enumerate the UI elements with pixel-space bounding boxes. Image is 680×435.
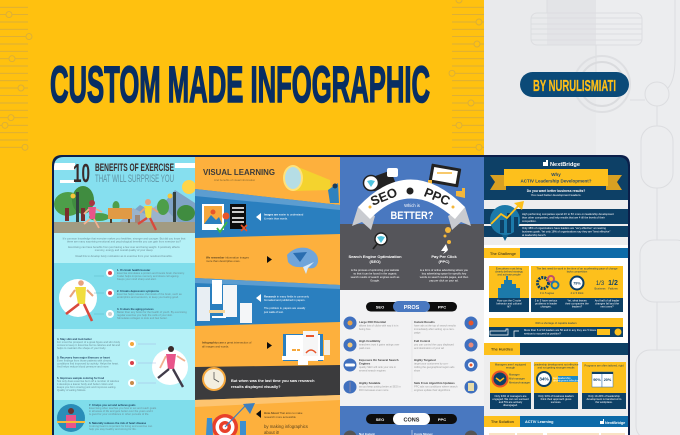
stats band [484, 200, 630, 245]
icon: magnifier and camera [364, 168, 398, 192]
pros list: Highly Targeted [414, 358, 436, 362]
seo description: search results of search engines such as [351, 275, 400, 279]
ribbon banner: ACTIV Leadership Development? [520, 178, 592, 184]
challenge box two: changes fail and the [595, 302, 620, 306]
pros list: PPC ads run conditions where search [414, 384, 458, 388]
pros list: and destination of your ad [414, 346, 444, 350]
intro text: Exercising can have benefits from just having a few over and being weight. It positively affects [68, 245, 180, 249]
ppc description: (PPC) [439, 259, 450, 264]
band: research: Research in many fields is commonly [264, 294, 310, 298]
section two: it develops a leaner body and better colors and [57, 382, 113, 386]
section two [57, 338, 188, 392]
section one: 1. It's brain health booster [117, 268, 150, 272]
challenge box two: 4 in 5 think [570, 291, 584, 295]
yellow background [0, 0, 484, 435]
hurdle box one: engaged. We can not succeed [492, 397, 529, 401]
pros header: SEO [376, 304, 384, 310]
ppc description [420, 254, 469, 282]
pros list: several search engines [359, 368, 386, 372]
section one: It also helps improve memory and slows cell ageing. [117, 274, 179, 278]
icon: monitor [282, 331, 330, 365]
seo description: so that it can be found in the organic [353, 272, 397, 276]
pros list: Engines [359, 362, 371, 366]
pros list: have ads at the top of search results [414, 324, 457, 328]
hurdle box two: Leadership development not effective [534, 362, 579, 366]
band: images: Images are easier to understand [264, 212, 304, 216]
pros list: immediately after setting up a cam- [414, 327, 455, 331]
icon: clock [202, 367, 226, 391]
pros header: PPC [438, 304, 446, 310]
section two: conditions find improved by activity. Helps the heart. [57, 362, 119, 366]
author badge [520, 72, 629, 97]
solution tab: ACTIV Learning [525, 420, 554, 424]
band: remember: We remember information images [206, 256, 249, 260]
stats band: competition. [522, 219, 537, 223]
heading number: 10 [73, 158, 90, 188]
panel: exercise benefits [54, 157, 196, 435]
logo: NextBridge [550, 162, 580, 168]
section two: comes to keep it. Exercise burns calories and fat and [57, 343, 121, 347]
band: research: The problem is, papers are usually [264, 306, 306, 310]
challenge box two: their companies the [565, 302, 589, 306]
intro text: Read this to develop lively motivation as to exercise from your newfound benefits. [76, 254, 173, 258]
stats band: at leadership bench. [522, 233, 546, 237]
challenge wide box: With a shortage of capable leaders [535, 321, 577, 325]
card frame [52, 155, 630, 435]
pros list: allows lots of clicks with say it is in [359, 324, 399, 328]
subheading: And benefits of visual information [214, 178, 256, 182]
pros list: High Credibility [359, 339, 381, 343]
which is better label: Which is [404, 203, 420, 208]
section three: A strong heart is important for living and exercise can [89, 424, 153, 428]
section one: endorphins and serotonin, to keep you feeling good. [117, 295, 179, 299]
hurdles tab: The Hurdles [491, 348, 513, 352]
ribbon arch [352, 180, 471, 230]
hurdle box two: think their approach gives [541, 397, 572, 401]
section three: is good for your confidence in other pursuits of life. [89, 412, 149, 416]
hurdle box two: Only 34% of business leaders [538, 394, 574, 398]
ppc description: Pay Per Click [431, 254, 457, 259]
icon: picture versus text [202, 204, 247, 232]
ribbon arch: PPC [422, 185, 453, 209]
stats band: Only 38% of organizations have leaders are "very effective" at meeting [522, 226, 606, 230]
stats band: business goals. Yet only 18% of organizations say they are "best effective" [522, 230, 610, 234]
hurdle box three: Programs are often tailored, rigid [584, 364, 624, 368]
section one: regular exercise you help the cells of your skin. [117, 313, 173, 317]
challenge box two: 1/2 [608, 280, 618, 287]
challenge box two: Failures [608, 286, 618, 290]
logo [543, 160, 580, 168]
pros list: paid ones [359, 346, 371, 350]
band: infographics [202, 331, 330, 365]
section two: helps to maintain the shape of your body. [57, 346, 106, 350]
icon: telescope [283, 165, 339, 203]
pros list [344, 316, 478, 394]
band: question: But when was the last time you saw research [231, 378, 315, 383]
hurdle box one [490, 362, 531, 409]
section two: 5. Recovery from major illnesses or heart [57, 356, 110, 360]
hurdle box two [534, 362, 580, 409]
intro text: memory, energy and overall quality of your sleep. [95, 248, 154, 252]
pros header: PROS [404, 305, 420, 311]
section one: Better than any botox for the health of youth. By exercising [117, 310, 187, 314]
stats band: High performing companies spend 2X to 5X more on leadership development [522, 212, 614, 216]
section two: 6. Improves sample coloring for food [57, 376, 105, 380]
hurdle box two: and not getting stronger results [537, 366, 575, 370]
hurdle box one: Mid-manager [509, 376, 525, 380]
icon: laptop and coins [425, 164, 465, 198]
ppc description: pay per click on your ad. [429, 278, 459, 282]
hero scene [54, 157, 196, 233]
panel: SEO vs PPC [340, 157, 484, 435]
band: remember [206, 248, 318, 274]
right tick decoration [449, 0, 484, 150]
section one [54, 263, 195, 329]
section three: Exercising often teaches you how to set and reach goals [89, 406, 157, 410]
hurdle box one: enough [506, 366, 515, 370]
seo description: is the process of optimizing your website [351, 268, 400, 272]
section two: Even findings from those patients with chronic [57, 358, 112, 362]
which is better label [391, 204, 433, 219]
pros list: show [414, 368, 420, 372]
section one: Exercise stimulates a protein and boosts brain chemistry. [117, 271, 185, 275]
pros list: engines update their algorithms [414, 388, 451, 392]
grey background panel [484, 0, 680, 435]
section two: And helps reduce blood pressure and more. [57, 364, 110, 368]
solution tab: The Solution [491, 420, 515, 424]
icon: seo magnifier [373, 233, 387, 249]
band: remember: more than descriptive ones. [206, 259, 241, 263]
solution boxes [489, 433, 625, 435]
challenge box two: 1/3 [596, 281, 605, 287]
challenge wide box: More than 6 of 10 leaders are 50 and in any they are 5 times as [524, 328, 600, 332]
section three: help you stay healthy and strong for life. [89, 427, 137, 431]
pros list: target your customers by con- [414, 362, 448, 366]
section one: Stimulates collagen to look and feel better. [117, 316, 168, 320]
challenge box one: clearly defined strategy [495, 270, 523, 274]
hurdle box three: development is transferred to [587, 397, 622, 401]
panel: leadership development [484, 157, 630, 435]
seo description: (SEO) [369, 259, 381, 264]
band: images: & retain than words. [264, 216, 288, 220]
section one: 3. It slows the aging process [117, 307, 154, 311]
hurdle box two: 34% [539, 377, 550, 383]
left tick decoration [0, 7, 32, 150]
banner sub text: Do you want better business results? [527, 189, 585, 193]
ribbon arch: SEO [368, 184, 399, 209]
challenge box one: and activate people [497, 272, 521, 276]
hurdle box two: Get leadership [553, 376, 571, 380]
solution tab: NextBridge [605, 421, 625, 425]
cons header: PPC [438, 417, 446, 422]
intro text: It's common knowledge that exercise makes you healthier, stronger and younger. But did you know that [63, 236, 186, 240]
icon: papers [197, 280, 252, 323]
section one: Exercise helps release chemicals of the brain, such as [117, 292, 182, 296]
hurdle box three: the workplace. [595, 400, 613, 404]
hurdle box one: disengaged. [503, 403, 518, 407]
hurdle box two: success. [551, 401, 561, 404]
icon: brain [287, 248, 318, 274]
section one: 2. It treats depression symptoms [117, 289, 159, 293]
challenge box two: lacks competition [567, 270, 588, 274]
seo description: Google. [370, 278, 380, 282]
challenge box one: How can the C-suite [497, 298, 522, 302]
chart: 79 percent ring: 79% [573, 282, 581, 286]
ribbon banner [490, 169, 622, 190]
section one: Keeps your mind sharp and alert. [117, 277, 157, 281]
hurdles tab [484, 343, 630, 416]
section two: keeps you from craving junk and improves eating. [57, 385, 116, 389]
pros list: Safe From Algorithm Updates [414, 381, 455, 385]
author badge: BY NURULISMIATI [533, 78, 616, 95]
pros list: Full Control [414, 339, 430, 343]
hurdle box three: 20% [604, 378, 612, 382]
hurdle box one: Only 34% of managers are [495, 394, 527, 398]
challenge box one: behavior and cultural [497, 302, 522, 306]
hurdle box one: Manager [509, 372, 520, 376]
section three: 8. Naturally reduces the risk of heart disease [89, 421, 147, 425]
cons header: CONS [404, 418, 420, 424]
challenge box two: leaders? [572, 304, 583, 308]
challenge box one [489, 266, 529, 312]
icon: ppc coins and cursor [441, 227, 451, 254]
section two: Not only does exercise burn off a number of calories [57, 379, 120, 383]
challenge wide box [489, 318, 623, 337]
band: how about: How About That aims to make [264, 411, 303, 415]
hurdle box three: Only 10-20% of leadership [588, 394, 620, 398]
pros list: you can control the copy displayed [414, 342, 454, 346]
ppc description: buy advertising space for specific key [422, 272, 467, 276]
challenge box two: problems in leader [535, 302, 557, 306]
banner sub text [527, 189, 585, 197]
section three [54, 400, 195, 435]
ppc description: is a form of online advertising where you [420, 268, 469, 272]
icon: globe chart [490, 201, 524, 241]
band: how about [195, 395, 340, 435]
heading line two: THAT WILL SURPRISE YOU [95, 173, 174, 185]
hurdle box two: development effective [553, 378, 580, 382]
band: question [195, 365, 340, 400]
hurdle box three [582, 362, 626, 409]
challenge box two [531, 266, 623, 312]
banner sub text: You need better development leaders. [531, 193, 581, 197]
hurdle box one: and 5% are actively [499, 400, 523, 404]
pros list: trolling the geographical region ads [414, 365, 455, 369]
intro text: there are many surprising emotional and psychological benefits you can gain from exercise too? [67, 240, 181, 244]
cons list [344, 430, 478, 435]
band: how about: about it! [264, 430, 279, 435]
challenge box two: 3 in 5 agree [540, 291, 555, 295]
challenge box one: Executives must bring [496, 266, 523, 270]
pros list: quality SEO will rank your site in [359, 365, 397, 369]
which is better label: BETTER? [390, 210, 434, 222]
section three: in all areas of life and gets better over the years and it [89, 409, 153, 413]
hurdle box one: Mentors/manager [509, 380, 530, 384]
infographic collage [54, 157, 630, 435]
icon: gears [538, 276, 558, 288]
challenge box two: 3 in 5 have serious [535, 298, 558, 302]
panel: visual learning [195, 157, 340, 435]
section two: 4. Stay slim and look better [57, 337, 92, 341]
challenge box one: fit? [507, 304, 511, 308]
heading: VISUAL LEARNING [203, 168, 275, 177]
intro text [63, 236, 186, 258]
challenge box two: The fast need for work in the time of an accelerating pace of change [537, 266, 618, 270]
pros list: Large ROI Potential [359, 320, 386, 324]
ribbon banner: Why [551, 172, 561, 177]
stats band: than other companies, and help results that are 4 till the levels of their [522, 216, 605, 220]
pros list: ROI increases even more [359, 388, 389, 392]
pros list: Highly Scalable [359, 381, 381, 385]
challenge tab [484, 248, 630, 258]
challenge box two: And half of all leader [595, 298, 619, 302]
band: question: results displayed visually? [231, 384, 281, 389]
band: images [195, 189, 340, 238]
band: infographics: Infographics are a great intersection of [202, 340, 252, 344]
solution tab [484, 416, 630, 427]
section two: Quality of eating follows. [57, 388, 86, 392]
pros list: searchers trust it gains ratings over [359, 342, 400, 346]
cons header [366, 413, 457, 425]
band: how about: research more accessible [264, 415, 296, 419]
band: research [195, 278, 340, 326]
challenge box two: changes. [541, 304, 552, 308]
cons header: SEO [376, 417, 384, 422]
ppc description: words on search results pages, and then [420, 275, 469, 279]
band: infographics: all images and words. [202, 344, 229, 348]
seo description: Search Engine Optimization [348, 254, 402, 259]
pros list: being free [359, 327, 371, 331]
hurdle box one: Managers aren't equipped [495, 362, 527, 366]
challenge box two: Business [595, 286, 606, 290]
pros list: as you keep putting better at SEO in [359, 384, 401, 388]
band: research: formatted and published in papers. [264, 298, 306, 302]
icon: target and dart [206, 403, 255, 435]
pros list: Exposure On Several Search [359, 358, 399, 362]
challenge box two: Yet, what leaves [567, 298, 587, 302]
challenge wide box: serious to succeed at position? [524, 332, 561, 336]
section two: For most the prospect of a great figure and slim body [57, 340, 121, 344]
heading line one: BENEFITS OF EXERCISE [95, 162, 174, 174]
seo description [348, 254, 402, 282]
section three: 7. It helps you set and achieve goals [89, 403, 136, 407]
pros list: Instant Results [414, 320, 435, 324]
pros list: paign [414, 330, 421, 334]
band: research: just walls of text. [263, 310, 284, 314]
challenge box two: next ones? [600, 304, 614, 308]
runner man [138, 199, 158, 230]
hurdle box three: 90% [593, 378, 601, 382]
runner woman [84, 200, 102, 228]
pros header [366, 301, 457, 312]
band: how about: by making infographics [264, 424, 308, 429]
challenge tab: The Challenge [490, 252, 516, 256]
